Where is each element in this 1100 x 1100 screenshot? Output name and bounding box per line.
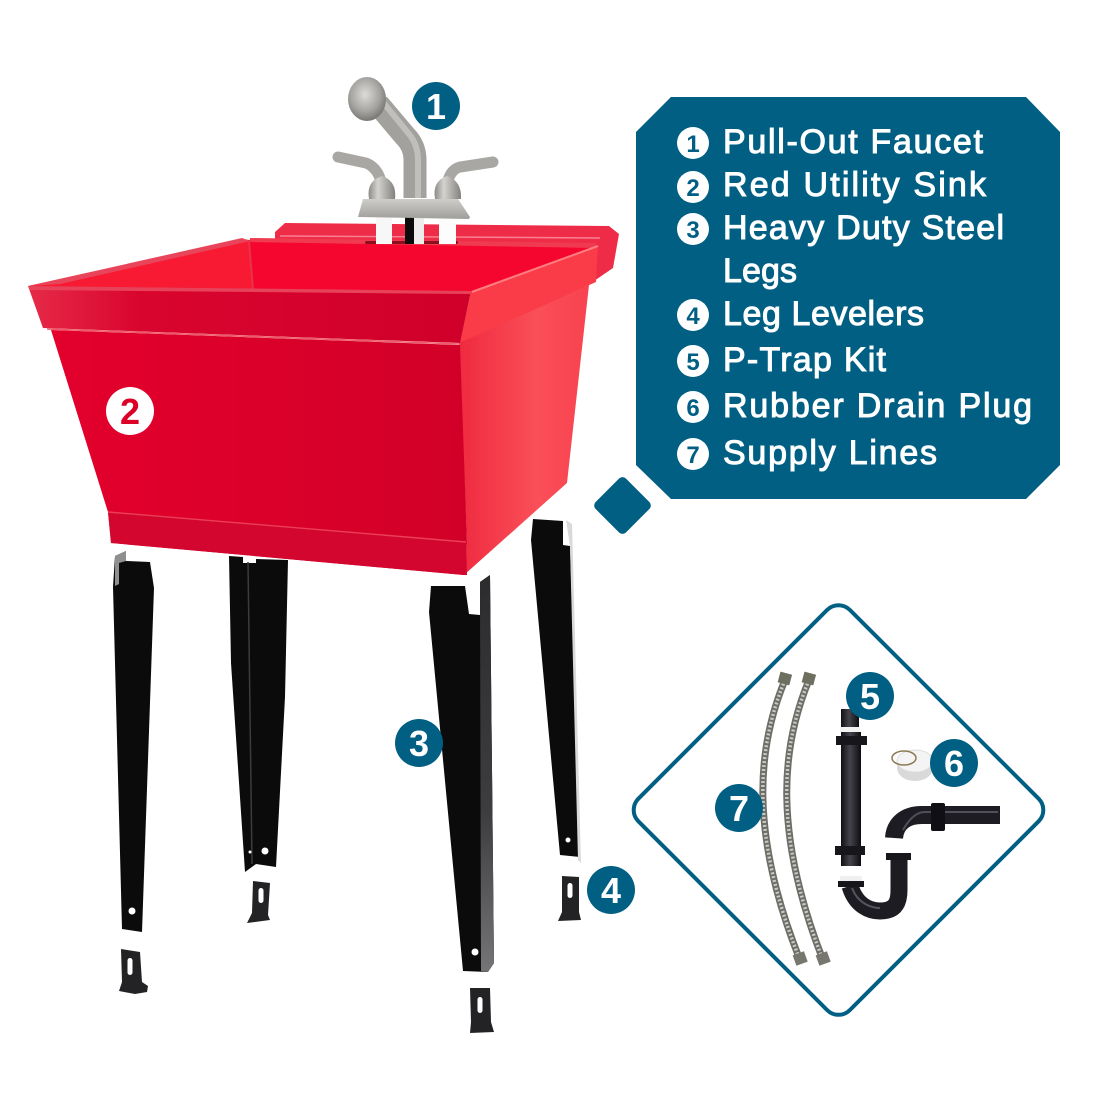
leg back right bbox=[531, 519, 581, 863]
leveler 3 bbox=[470, 988, 494, 1033]
leg back left bbox=[229, 556, 288, 872]
list item 6: Rubber Drain Plug bbox=[723, 387, 1032, 425]
leg front left bbox=[113, 551, 154, 932]
faucet handles bbox=[338, 157, 493, 199]
list item 1: Pull-Out Faucet bbox=[723, 123, 984, 161]
faucet base plate bbox=[358, 199, 470, 219]
number badge 3: 3 bbox=[409, 723, 429, 764]
leg front right bbox=[429, 575, 494, 972]
number badge 2 bbox=[106, 387, 154, 435]
callout panel: parts list bbox=[636, 97, 1060, 499]
number badge 7: 7 bbox=[729, 788, 749, 829]
number badge 1: 1 bbox=[426, 86, 446, 127]
list item 3: Legs bbox=[723, 252, 797, 290]
small decorative diamond pointer bbox=[592, 475, 653, 536]
leveler 2 bbox=[247, 881, 270, 923]
list item 4: Leg Levelers bbox=[723, 295, 924, 333]
list item 2: 2 bbox=[686, 175, 700, 202]
number badge 5 bbox=[846, 672, 894, 720]
number badge 4 bbox=[587, 866, 635, 914]
supply lines bbox=[763, 672, 831, 966]
number badge 7 bbox=[715, 784, 763, 832]
number badge 4: 4 bbox=[601, 870, 621, 911]
panel background bbox=[636, 97, 1060, 499]
back flange bbox=[275, 223, 619, 281]
list item 3 bbox=[677, 209, 1004, 290]
hose right bbox=[787, 672, 831, 966]
tub right side bbox=[459, 245, 598, 575]
number badge 2: 2 bbox=[120, 391, 140, 432]
number badge 5: 5 bbox=[860, 676, 880, 717]
leveler 1 bbox=[119, 949, 148, 994]
list item 5: P-Trap Kit bbox=[723, 341, 887, 379]
faucet bbox=[338, 77, 493, 244]
list item 6: 6 bbox=[686, 395, 700, 422]
faucet supply pipes bbox=[365, 216, 458, 244]
list item 3: 3 bbox=[686, 217, 700, 244]
leg levelers bbox=[119, 876, 581, 1033]
list item 3: Heavy Duty Steel bbox=[723, 209, 1004, 247]
rubber drain plug bbox=[892, 750, 933, 781]
list item 2: Red Utility Sink bbox=[723, 166, 987, 204]
p-trap kit bbox=[835, 709, 1000, 911]
faucet spout bbox=[348, 77, 418, 198]
leveler 4 bbox=[558, 876, 581, 921]
list item 7: Supply Lines bbox=[723, 434, 937, 472]
sink tub bbox=[28, 223, 619, 575]
hose left bbox=[763, 672, 808, 966]
number badge 6: 6 bbox=[944, 743, 964, 784]
steel legs bbox=[113, 519, 581, 972]
list item 1: 1 bbox=[686, 131, 700, 158]
list item 7: 7 bbox=[686, 442, 700, 469]
list item 4: 4 bbox=[686, 303, 700, 330]
list item 5: 5 bbox=[686, 349, 700, 376]
tub interior bbox=[28, 238, 598, 292]
number badge 1 bbox=[412, 82, 460, 130]
tailpiece pipe bbox=[835, 709, 867, 866]
u bend bbox=[838, 853, 911, 911]
number badge 6 bbox=[930, 739, 978, 787]
tub front bbox=[28, 286, 471, 575]
number badge 3 bbox=[395, 719, 443, 767]
elbow pipe bbox=[894, 803, 1000, 838]
accessories diamond frame bbox=[627, 599, 1050, 1021]
